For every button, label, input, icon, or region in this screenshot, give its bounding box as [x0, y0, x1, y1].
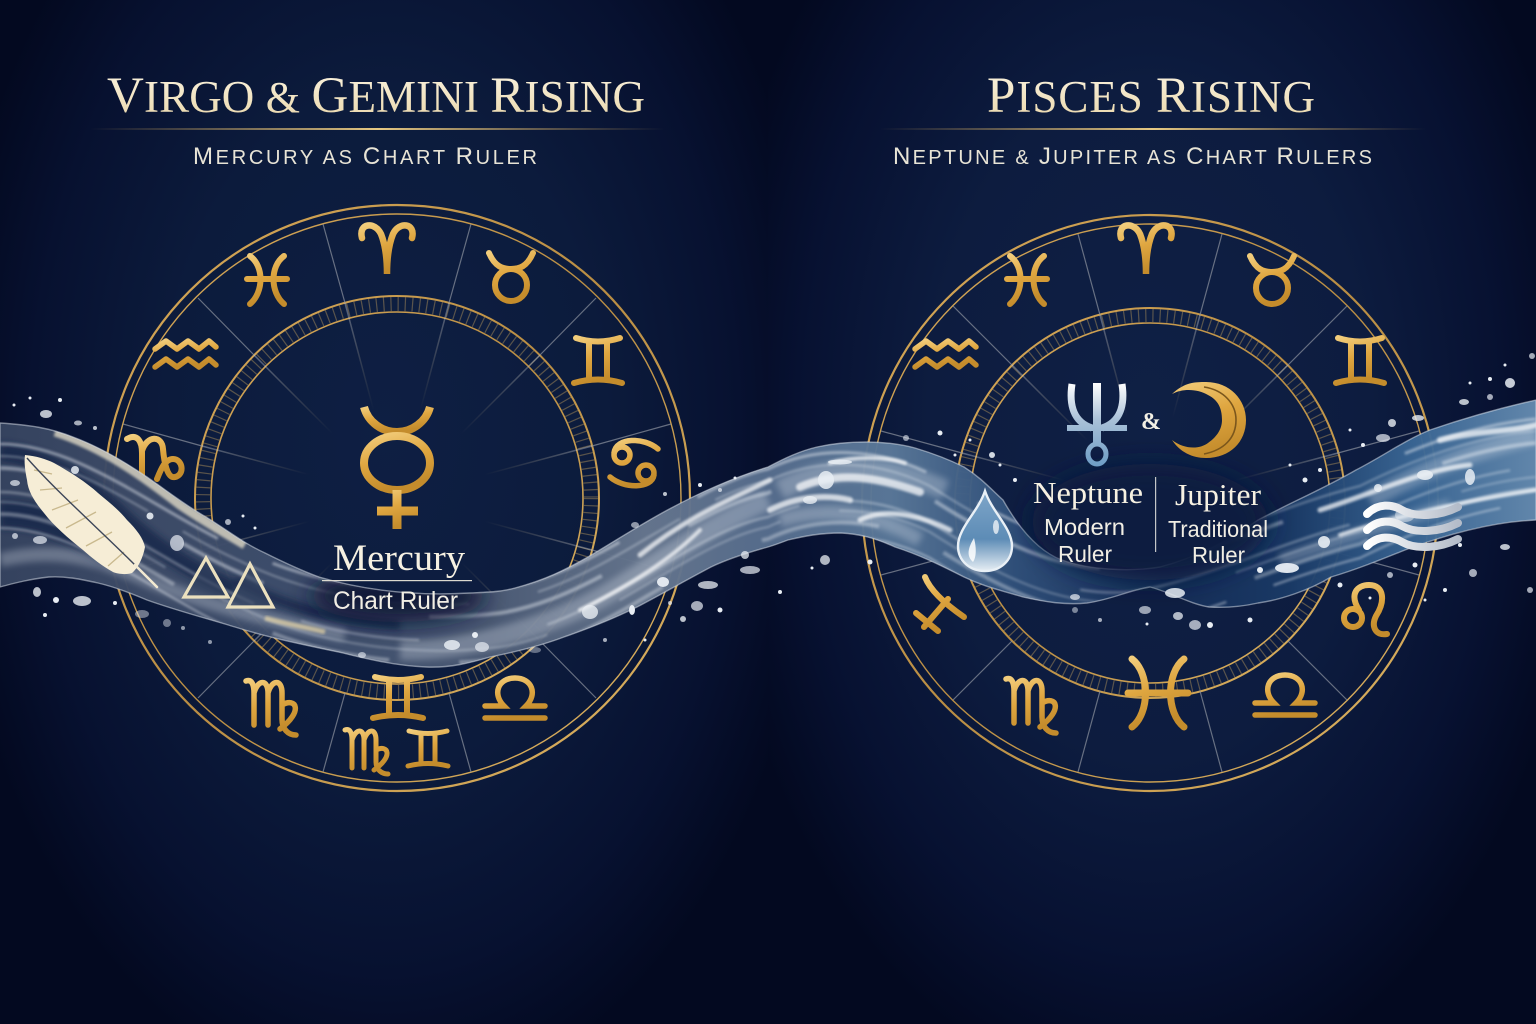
title: Virgo and Gemini Rising: VIRGO & GEMINI RISING: [107, 68, 645, 124]
label: Neptune: Neptune: [1033, 475, 1143, 510]
icon: Gemini lower: [373, 677, 423, 718]
icon: Libra right: [1255, 675, 1315, 715]
icon: Taurus: [489, 253, 533, 301]
icon: Sagittarius: [916, 577, 964, 631]
icon: Pisces large: [1128, 659, 1188, 727]
divider between rulers: [1155, 477, 1156, 552]
soft silver bands: [0, 435, 1536, 650]
icon: Pisces: [247, 256, 287, 304]
panel: Virgo and Gemini Rising header: [90, 68, 665, 170]
icon: Pisces right: [1007, 256, 1047, 304]
icon: small Gemini: [408, 731, 448, 766]
icon: water drop: [958, 491, 1012, 571]
cream edge along left top: [55, 432, 245, 545]
icon: air triangles: [184, 558, 273, 607]
icon: Leo: [1344, 585, 1387, 634]
label: ampersand: &: [1141, 409, 1161, 435]
icon: Virgo right: [1006, 679, 1056, 733]
icon: Aquarius right: [915, 341, 976, 367]
icon: feather: [25, 455, 157, 587]
icon: Capricorn: [127, 437, 182, 479]
icon: Jupiter crescent: [1172, 382, 1246, 458]
icon: Aquarius: [155, 341, 216, 367]
dark pool behind Mercury label: [310, 570, 486, 622]
subtitle: Neptune and Jupiter as chart rulers: NEPTUNE & JUPITER AS CHART RULERS: [893, 143, 1372, 170]
panel: Pisces Rising header: [880, 68, 1426, 170]
zodiac wheel: left: [104, 205, 690, 791]
icon: Taurus right: [1250, 256, 1294, 304]
dark pool behind Neptune and Jupiter labels: [1032, 464, 1268, 580]
icon: Libra: [485, 678, 545, 718]
label: Ruler left: Ruler: [1058, 541, 1112, 567]
divider under left title: [90, 128, 665, 130]
background: left panel: [0, 0, 768, 1024]
label: Traditional: Traditional: [1168, 516, 1268, 542]
icon: Gemini right: [1336, 338, 1384, 383]
silver highlights in the central stretch: [580, 425, 1536, 610]
title: Pisces Rising: PISCES RISING: [987, 68, 1315, 124]
ribbon edge lines: [0, 400, 1536, 667]
divider under right title: [880, 128, 1426, 130]
icon: Gemini: [574, 338, 622, 383]
icon: Aries right: [1120, 225, 1172, 274]
icon: Mercury symbol: [364, 407, 430, 529]
icon: water waves: [1367, 506, 1458, 547]
dark bands left: [0, 452, 400, 625]
divider under Mercury: [322, 580, 472, 581]
icon: Neptune symbol: [1067, 383, 1127, 464]
label: Jupiter: Jupiter: [1175, 477, 1262, 512]
icon: Cancer: [610, 440, 658, 486]
icon: Virgo: [246, 681, 296, 735]
icon: Aries: [361, 225, 413, 274]
icon: small Virgo: [345, 730, 388, 774]
zodiac wheel: right: [862, 215, 1438, 791]
water droplets and spray: [10, 353, 1535, 658]
label: Chart Ruler: Chart Ruler: [333, 587, 458, 615]
label: Modern Ruler left: Modern: [1044, 514, 1125, 540]
label: Ruler right: Ruler: [1192, 542, 1245, 568]
background: right panel: [768, 0, 1536, 1024]
water ribbon: [0, 400, 1536, 677]
gold glint on the left ribbon: [265, 618, 325, 632]
label: Mercury: Mercury: [333, 538, 466, 579]
subtitle: Mercury as chart ruler: MERCURY AS CHART RULER: [193, 143, 537, 170]
